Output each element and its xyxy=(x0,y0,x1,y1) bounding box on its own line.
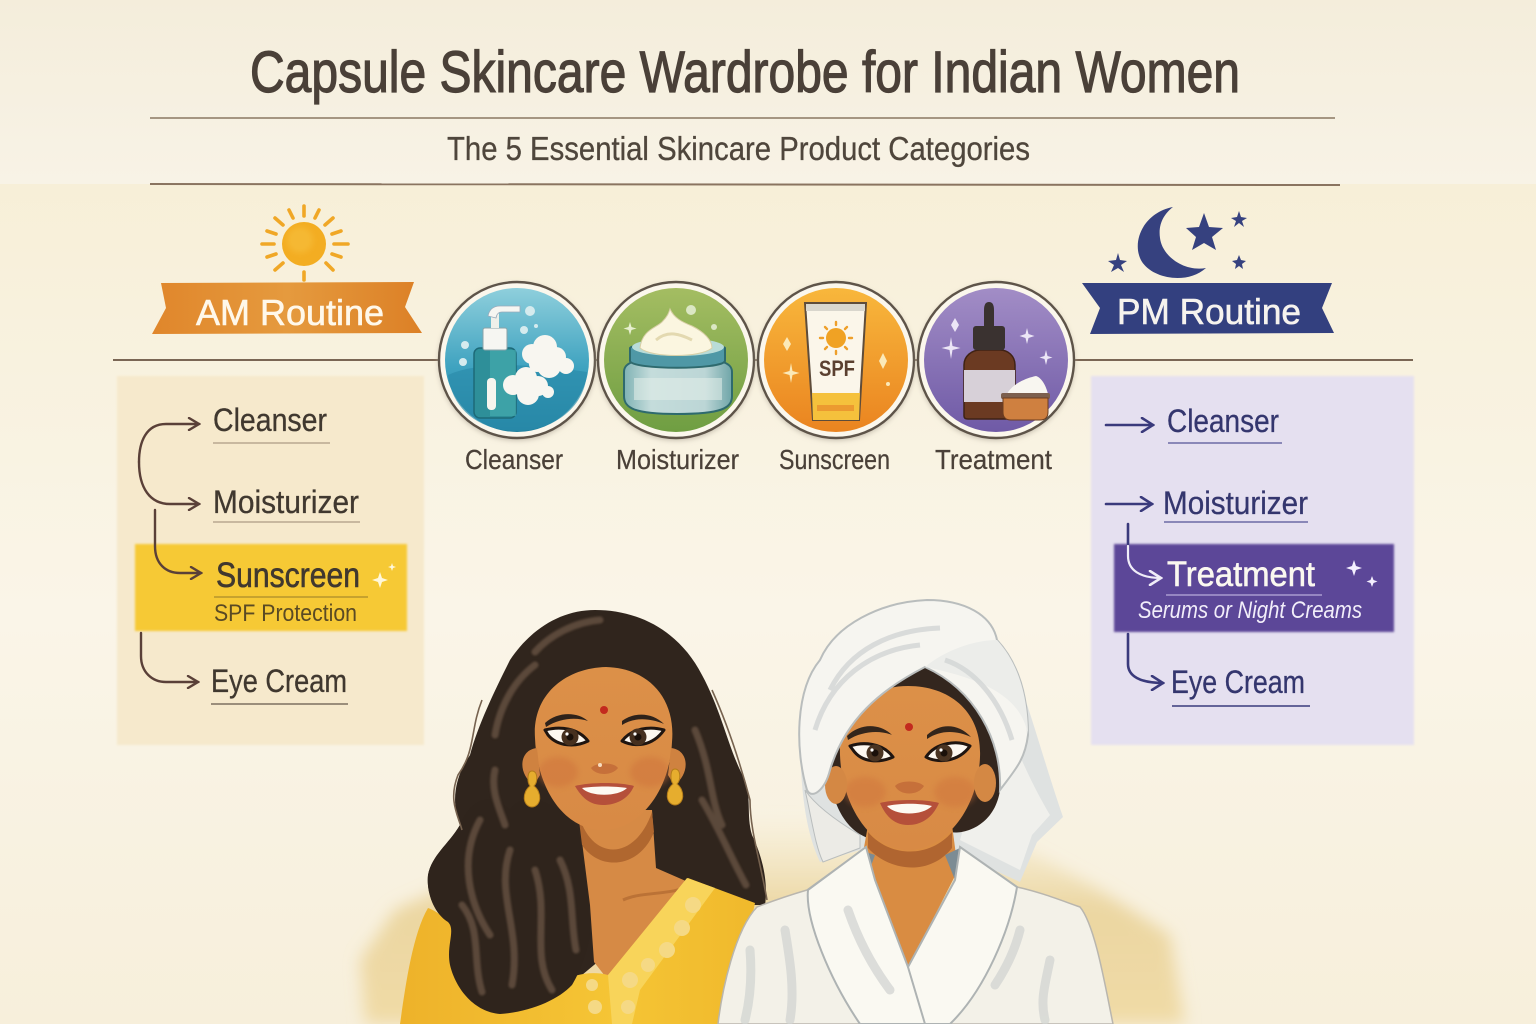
SPF tube: SPF xyxy=(819,356,855,381)
face xyxy=(840,686,980,850)
icon: cleanser xyxy=(439,282,595,440)
AM flow arrows xyxy=(139,424,201,682)
icon: moisturizer xyxy=(598,282,754,440)
ears xyxy=(825,764,996,804)
cream jar xyxy=(624,309,732,414)
serum dropper bottle xyxy=(964,302,1015,419)
title divider xyxy=(150,117,1335,118)
face xyxy=(535,667,672,830)
AM step: cleanser: Cleanser xyxy=(213,402,327,438)
label: treatment: Treatment xyxy=(935,444,1052,475)
AM routine ribbon: AM Routine xyxy=(196,292,384,333)
SPF tube xyxy=(805,303,866,420)
eyes, brows, bindi, nose, mouth xyxy=(847,723,971,825)
PM step: eye cream: Eye Cream xyxy=(1171,664,1305,700)
PM routine ribbon: PM Routine xyxy=(1117,291,1301,332)
subtitle: The 5 Essential Skincare Product Categories xyxy=(447,130,1030,167)
ears and earrings xyxy=(522,748,686,807)
towel turban xyxy=(799,600,1028,794)
yellow kurta xyxy=(400,878,755,1024)
front hair locks xyxy=(428,799,590,1014)
label: moisturizer: Moisturizer xyxy=(616,444,739,475)
PM step: moisturizer: Moisturizer xyxy=(1163,485,1308,521)
icon: moon and stars xyxy=(1108,207,1247,278)
small cream jar xyxy=(1001,376,1050,420)
horizontal routine line xyxy=(113,359,1413,361)
neck and chest xyxy=(578,810,695,985)
AM step: sunscreen SPF protection: SPF Protection xyxy=(214,600,357,627)
AM step: moisturizer: Moisturizer xyxy=(213,484,359,520)
sunscreen highlight band xyxy=(135,544,407,631)
PM routine ribbon xyxy=(1082,283,1334,334)
icon: treatment xyxy=(918,282,1074,440)
PM step: treatment serums or night creams xyxy=(1138,555,1378,624)
hair around face xyxy=(829,665,1001,838)
label: cleanser: Cleanser xyxy=(465,444,563,475)
neck xyxy=(860,825,958,968)
panel: PM routine steps xyxy=(1091,376,1414,745)
AM step: eye cream: Eye Cream xyxy=(211,663,347,699)
towel back drape xyxy=(800,640,1063,882)
PM step: treatment serums or night creams: Serums or Night Creams xyxy=(1138,597,1362,624)
hair back xyxy=(428,610,766,1014)
pump bottle xyxy=(474,306,520,418)
PM step: treatment serums or night creams: Treatment xyxy=(1167,555,1315,594)
white robe xyxy=(718,847,1113,1024)
icon: sunscreen xyxy=(758,282,914,440)
foam clouds xyxy=(503,335,574,405)
eyes, brows, bindi, nose, mouth xyxy=(545,706,664,805)
title: Capsule Skincare Wardrobe for Indian Women xyxy=(250,40,1240,105)
illustration: woman with long hair in yellow kurta xyxy=(400,610,767,1024)
icon labels xyxy=(465,444,1052,475)
icon: sun xyxy=(262,206,348,280)
PM step: cleanser: Cleanser xyxy=(1167,403,1279,439)
golden watercolor wash behind the women xyxy=(360,815,1185,1024)
label: sunscreen: Sunscreen xyxy=(779,444,890,475)
panel: AM routine steps xyxy=(117,376,424,745)
AM step: sunscreen SPF protection: Sunscreen xyxy=(216,556,360,595)
header divider xyxy=(150,183,1340,185)
treatment highlight band xyxy=(1114,544,1394,632)
AM routine ribbon xyxy=(152,282,422,334)
AM step: sunscreen SPF protection xyxy=(214,556,396,627)
illustration: woman with towel turban in white robe xyxy=(718,600,1113,1024)
PM flow arrows xyxy=(1106,425,1163,683)
